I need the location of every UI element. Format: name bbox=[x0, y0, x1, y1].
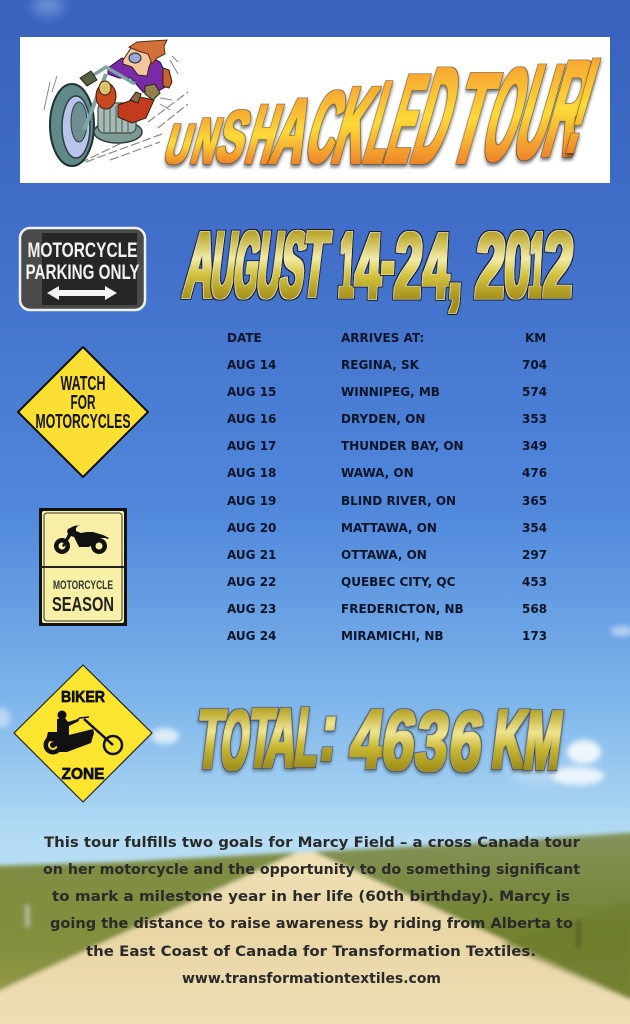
row: Aug 19: 365 bbox=[522, 494, 547, 508]
row: Aug 22: 453 bbox=[522, 575, 547, 589]
row: Aug 20: AUG 20 bbox=[227, 521, 276, 535]
row: Aug 15 bbox=[227, 385, 547, 399]
row: Aug 15: 574 bbox=[522, 385, 547, 399]
heading: tour dates: 4 bbox=[421, 213, 452, 318]
sign: watch for motorcycles: MOTORCYCLES bbox=[36, 411, 130, 433]
row: Aug 17 bbox=[227, 439, 547, 453]
heading: tour dates: T bbox=[298, 211, 334, 316]
row: Aug 17: AUG 17 bbox=[227, 439, 276, 453]
row: Aug 14 bbox=[227, 358, 547, 372]
description paragraph: This tour fulfills two goals for Marcy Field – a cross Canada tour bbox=[44, 835, 581, 851]
heading: tour dates: 1 bbox=[337, 212, 357, 317]
sign: motorcycle parking only: PARKING ONLY bbox=[26, 261, 140, 284]
heading: total distance: 3 bbox=[411, 694, 454, 788]
icon: motorcycle silhouette bbox=[54, 525, 109, 554]
heading: tour dates: S bbox=[276, 212, 311, 317]
heading: tour dates: G bbox=[230, 212, 265, 317]
description paragraph: on her motorcycle and the opportunity to do something significant bbox=[43, 862, 580, 878]
description paragraph: going the distance to raise awareness by riding from Alberta to bbox=[50, 916, 573, 932]
heading: tour dates: , bbox=[446, 213, 466, 318]
row: Aug 20 bbox=[227, 521, 547, 535]
heading: tour dates: 0 bbox=[502, 212, 533, 317]
schedule table bbox=[227, 331, 547, 643]
description paragraph bbox=[43, 835, 581, 987]
row: Aug 14: AUG 14 bbox=[227, 358, 276, 372]
title wordart bbox=[159, 30, 612, 192]
sign: motorcycle parking only: MOTORCYCLE bbox=[28, 239, 138, 262]
heading: tour dates: 4 bbox=[353, 213, 384, 318]
table header: ARRIVES AT: bbox=[341, 331, 424, 345]
sign: motorcycle parking only bbox=[20, 228, 145, 310]
row: Aug 22 bbox=[227, 575, 547, 589]
row: Aug 18 bbox=[227, 466, 547, 480]
title wordart: T bbox=[437, 46, 510, 191]
sign: watch for motorcycles: FOR bbox=[70, 392, 96, 414]
table header: DATE bbox=[227, 331, 262, 345]
heading: total distance: A bbox=[261, 691, 303, 785]
row: Aug 17: THUNDER BAY, ON bbox=[341, 439, 464, 453]
heading: tour dates: 2 bbox=[541, 212, 576, 317]
title wordart: S bbox=[209, 96, 259, 178]
sign: motorcycle season bbox=[39, 508, 127, 626]
heading: tour dates: U bbox=[253, 212, 288, 317]
row: Aug 15: AUG 15 bbox=[227, 385, 276, 399]
title wordart: D bbox=[400, 39, 475, 192]
row: Aug 20: MATTAWA, ON bbox=[341, 521, 437, 535]
heading: tour dates: 2 bbox=[392, 213, 425, 318]
heading: tour dates: U bbox=[207, 212, 242, 317]
table header bbox=[227, 331, 546, 345]
heading: tour dates: A bbox=[180, 212, 222, 317]
row: Aug 17: 349 bbox=[522, 439, 547, 453]
sign: biker zone: BIKER bbox=[61, 689, 105, 706]
row: Aug 24: 173 bbox=[522, 629, 547, 643]
heading: total distance: M bbox=[520, 693, 567, 787]
row: Aug 21: OTTAWA, ON bbox=[341, 548, 427, 562]
row: Aug 14: REGINA, SK bbox=[341, 358, 420, 372]
heading: total distance: T bbox=[192, 692, 229, 786]
heading: total distance: T bbox=[244, 691, 279, 785]
icon: biker silhouette bbox=[44, 710, 122, 754]
table header: KM bbox=[525, 331, 546, 345]
icon: cartoon biker on motorcycle bbox=[44, 40, 188, 166]
row: Aug 16 bbox=[227, 412, 547, 426]
row: Aug 18: WAWA, ON bbox=[341, 466, 414, 480]
row: Aug 23: FREDERICTON, NB bbox=[341, 602, 464, 616]
title wordart: N bbox=[185, 105, 229, 177]
row: Aug 16: AUG 16 bbox=[227, 412, 276, 426]
title wordart: K bbox=[322, 63, 389, 187]
heading: tour dates: 2 bbox=[473, 213, 508, 318]
sign: watch for motorcycles bbox=[18, 347, 148, 477]
row: Aug 21: 297 bbox=[522, 548, 547, 562]
row: Aug 22: AUG 22 bbox=[227, 575, 276, 589]
title banner bbox=[20, 30, 612, 192]
description paragraph: the East Coast of Canada for Transformation Textiles. bbox=[86, 944, 536, 960]
heading: total distance: L bbox=[291, 690, 324, 784]
row: Aug 24: MIRAMICHI, NB bbox=[341, 629, 444, 643]
row: Aug 21 bbox=[227, 548, 547, 562]
title wordart: H bbox=[238, 88, 291, 182]
row: Aug 14: 704 bbox=[522, 358, 547, 372]
website link text: www.transformationtextiles.com bbox=[182, 971, 441, 987]
heading: total distance: 4 bbox=[346, 692, 389, 786]
title wordart: L bbox=[354, 56, 413, 188]
heading: tour dates: 1 bbox=[527, 212, 547, 317]
description paragraph: to mark a milestone year in her life (60th birthday). Marcy is bbox=[52, 889, 570, 905]
title wordart: U bbox=[159, 113, 200, 175]
row: Aug 16: DRYDEN, ON bbox=[341, 412, 425, 426]
row: Aug 23: 568 bbox=[522, 602, 547, 616]
heading: total distance: K bbox=[488, 692, 532, 786]
row: Aug 18: AUG 18 bbox=[227, 466, 276, 480]
row: Aug 23: AUG 23 bbox=[227, 602, 276, 616]
row: Aug 19: BLIND RIVER, ON bbox=[341, 494, 456, 508]
sign: biker zone: ZONE bbox=[62, 766, 105, 783]
sign: motorcycle season: MOTORCYCLE bbox=[53, 578, 113, 592]
row: Aug 19 bbox=[227, 494, 547, 508]
title wordart: O bbox=[470, 40, 543, 188]
sign: biker zone bbox=[14, 665, 152, 802]
row: Aug 22: QUEBEC CITY, QC bbox=[341, 575, 456, 589]
row: Aug 21: AUG 21 bbox=[227, 548, 276, 562]
row: Aug 18: 476 bbox=[522, 466, 547, 480]
row: Aug 20: 354 bbox=[522, 521, 547, 535]
heading: total distance: 6 bbox=[378, 693, 421, 787]
row: Aug 24: AUG 24 bbox=[227, 629, 276, 643]
heading: total distance: 6 bbox=[445, 694, 488, 788]
title wordart: A bbox=[262, 80, 324, 184]
heading: total distance: O bbox=[217, 693, 255, 787]
row: Aug 19: AUG 19 bbox=[227, 494, 276, 508]
heading: total distance bbox=[192, 684, 567, 788]
heading: total distance: : bbox=[316, 684, 343, 778]
row: Aug 16: 353 bbox=[522, 412, 547, 426]
row: Aug 23 bbox=[227, 602, 547, 616]
heading: tour dates bbox=[180, 207, 576, 318]
sign: motorcycle season: SEASON bbox=[52, 594, 114, 616]
heading: tour dates: - bbox=[379, 207, 397, 312]
sign: watch for motorcycles: WATCH bbox=[60, 373, 106, 395]
title wordart: C bbox=[296, 71, 356, 185]
row: Aug 15: WINNIPEG, MB bbox=[341, 385, 440, 399]
row: Aug 24 bbox=[227, 629, 547, 643]
title wordart: E bbox=[374, 47, 440, 190]
